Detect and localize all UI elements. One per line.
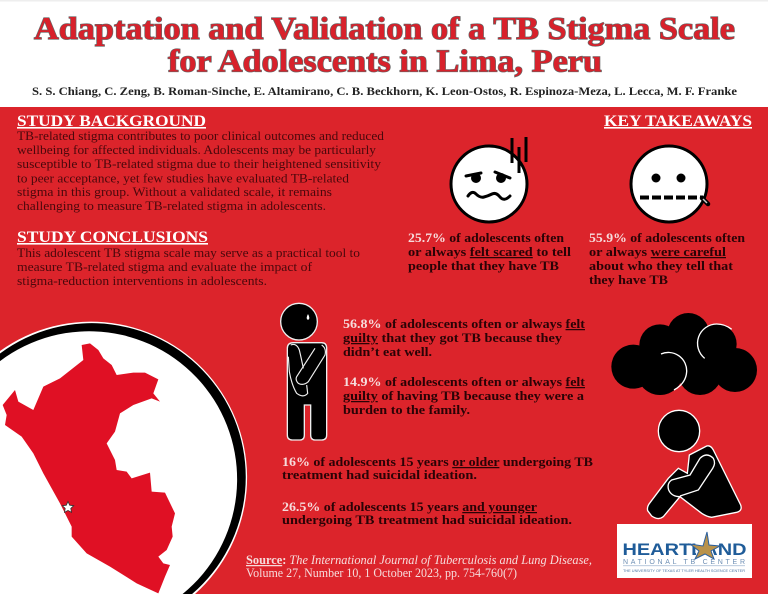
text block: study background [17, 129, 385, 213]
text block: study background: stigma in this group. Without a validated scale, it remains [17, 185, 332, 199]
heading: study conclusions: STUDY CONCLUSIONS [17, 229, 208, 246]
icon: dark cloud [611, 313, 757, 395]
source citation: Source: The International Journal of Tuberculosis and Lung Disease, [246, 553, 592, 567]
stat: were careful [589, 231, 745, 287]
stat: guilty did not eat well: didn’t eat well. [343, 345, 432, 359]
icon: Peru map in circle [0, 322, 247, 594]
stat: felt scared [408, 231, 572, 273]
logo: Heartland National TB Center: THE UNIVERSITY OF TEXAS AT TYLER HEALTH SCIENCE CENTER [623, 569, 746, 573]
stat: were careful: about who they tell that [589, 259, 734, 273]
text block: study background: TB-related stigma contributes to poor clinical outcomes and reduced [17, 129, 385, 143]
Peru outline [3, 343, 175, 593]
stat: guilty burden to family: 14.9% of adolescents often or always felt [343, 375, 586, 389]
text block: study background: susceptible to TB-related stigma due to their heightened sensitivity [17, 157, 382, 171]
source citation: Volume 27, Number 10, 1 October 2023, pp. 754-760(7) [246, 566, 517, 580]
stat: suicidal ideation 15 and younger [282, 500, 572, 527]
stat: were careful: 55.9% of adolescents often [589, 231, 745, 245]
logo: Heartland National TB Center: HEARTLAND [622, 540, 746, 559]
icon: worried face [451, 137, 527, 222]
title: for Adolescents in Lima, Peru [168, 42, 602, 78]
text block: study conclusions: This adolescent TB stigma scale may serve as a practical tool to [17, 246, 360, 260]
logo: Heartland National TB Center: NATIONAL TB CENTER [623, 559, 745, 566]
text block: study background: challenging to measure TB-related stigma in adolescents. [17, 199, 326, 213]
stat: guilty did not eat well: 56.8% of adolescents often or always felt [343, 317, 586, 331]
stat: guilty did not eat well: guilty that they got TB because they [343, 331, 563, 345]
stat: were careful: or always were careful [589, 245, 727, 259]
stat: suicidal ideation 15 or older [282, 455, 593, 482]
title: Adaptation and Validation of a TB Stigma Scale [34, 10, 735, 46]
stat: suicidal ideation 15 and younger: 26.5% of adolescents 15 years and younger [282, 500, 538, 514]
stat: felt scared: or always felt scared to tell [408, 245, 572, 259]
heading: study background: STUDY BACKGROUND [17, 113, 206, 130]
stat: felt scared: people that they have TB [408, 259, 559, 273]
text block: study conclusions: stigma-reduction interventions in adolescents. [17, 274, 267, 288]
star: Lima [62, 502, 74, 512]
stat: guilty burden to family [343, 375, 586, 417]
icon: sitting sad figure [647, 410, 741, 519]
icon: standing guilty figure [281, 303, 327, 440]
stat: guilty burden to family: guilty of having TB because they were a [343, 389, 585, 403]
stat: felt scared: 25.7% of adolescents often [408, 231, 564, 245]
stat: guilty did not eat well [343, 317, 586, 359]
text block: study background: wellbeing for affected individuals. Adolescents may be particularly [17, 143, 377, 157]
authors: S. S. Chiang, C. Zeng, B. Roman-Sinche, E. Altamirano, C. B. Beckhorn, K. Leon-Ostos, R. Espinoza-Meza, L. Lecca, M. F. Franke [32, 84, 738, 98]
stat: suicidal ideation 15 or older: 16% of adolescents 15 years or older undergoing TB [282, 455, 593, 469]
text block: study background: to peer acceptance, yet few studies have evaluated TB-related [17, 172, 350, 186]
text block: study conclusions [17, 246, 360, 288]
stat: suicidal ideation 15 or older: treatment had suicidal ideation. [282, 468, 477, 482]
stat: were careful: they have TB [589, 273, 668, 287]
source citation [246, 553, 592, 580]
icon: zipped mouth face [631, 146, 708, 222]
heading: key takeaways: KEY TAKEAWAYS [604, 113, 752, 130]
title [34, 10, 735, 78]
text block: study conclusions: measure TB-related stigma and evaluate the impact of [17, 260, 313, 274]
logo: Heartland National TB Center [617, 524, 752, 578]
stat: suicidal ideation 15 and younger: undergoing TB treatment had suicidal ideation. [282, 513, 572, 527]
stat: guilty burden to family: burden to the family. [343, 403, 470, 417]
